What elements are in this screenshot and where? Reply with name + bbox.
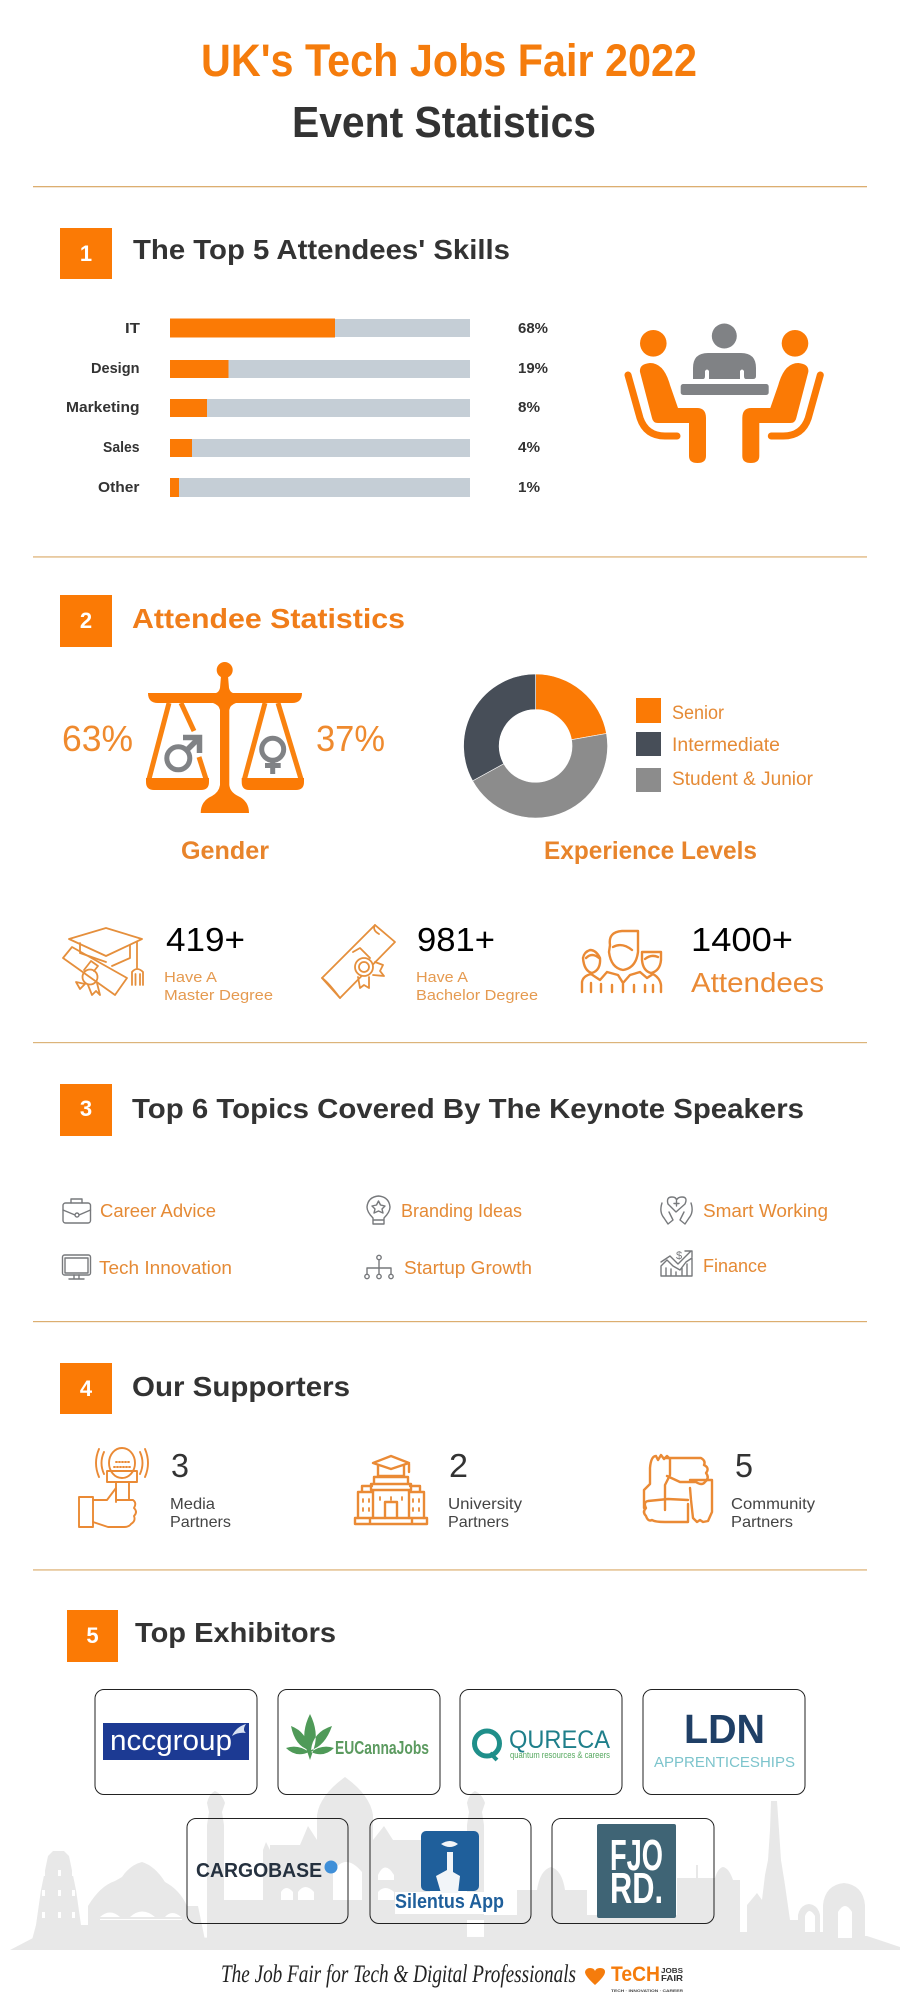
stat: media partners: 3 [171,1447,189,1484]
card: nccgroup: nccgroup [110,1725,232,1757]
stat: university partners: University [448,1496,522,1513]
topic: smart working: Smart Working [703,1201,828,1221]
topic: finance [661,1250,767,1276]
panel: keynote topics [60,1084,828,1279]
panel: top 5 skills [60,228,820,497]
stat: 1400+ attendees [691,921,824,998]
bar chart: skills: IT [125,320,140,337]
card: Fjord: RD. [610,1864,663,1913]
badge 1: 1 [80,241,92,266]
card: nccgroup [95,1690,257,1794]
card: Fjord: FJO [610,1831,663,1880]
bar chart: skills: 1% [518,479,540,496]
card: Silentus App: Silentus App [395,1891,504,1913]
topic: tech innovation: Tech Innovation [99,1258,232,1278]
label: gender: Gender [181,837,269,865]
badge 3: 3 [80,1096,92,1121]
card: QURECA: QURECA [509,1726,610,1754]
gender percentages: 37% [316,718,385,759]
card: Silentus App [370,1818,531,1924]
badge 2: 2 [80,608,92,633]
legend: experience levels: Student & Junior [672,769,814,790]
badge 1 [60,228,112,279]
stat: 981+ bachelors: 981+ [417,921,495,958]
panel: top exhibitors [67,1610,805,1924]
topic: smart working [661,1197,828,1224]
card: Cargobase: CARGOBASE [196,1860,322,1882]
logo: tech jobs fair: TeCH [611,1963,660,1986]
stat: 981+ bachelors: Bachelor Degree [416,987,538,1004]
icon: gender scale [146,662,304,813]
topic: branding ideas: Branding Ideas [401,1201,522,1221]
icon: attendees group [582,931,661,992]
stat: 419+ masters: Have A [164,969,217,986]
bar chart: skills: Sales [103,439,140,456]
badge 4: 4 [80,1376,93,1401]
stat: media partners [170,1447,231,1531]
badge 4 [60,1363,112,1414]
bar chart: skills: 68% [518,320,548,337]
topic: tech innovation [62,1255,232,1279]
stat: 419+ masters: 419+ [166,921,245,958]
badge 5: 5 [86,1623,99,1648]
card: Cargobase [187,1818,348,1924]
heading: top exhibitors: Top Exhibitors [135,1617,336,1648]
panel: supporters [60,1363,815,1531]
card: QURECA: quantum resources & careers [510,1750,610,1760]
legend: experience levels: Intermediate [672,735,780,756]
bar chart: skills: 4% [518,439,540,456]
logo: tech jobs fair [611,1963,683,1993]
icon: graduation cap [63,928,143,995]
bar chart: skills: 8% [518,399,540,416]
icon: joined hands [644,1455,712,1522]
bar chart: skills: Other [98,479,140,496]
stat: community partners: Partners [731,1514,793,1531]
bar chart: skills: Design [91,360,140,377]
topic: branding ideas [367,1196,522,1224]
stat: community partners: Community [731,1496,815,1513]
heading: keynote topics: Top 6 Topics Covered By The Keynote Speakers [132,1093,804,1124]
stat: 981+ bachelors: Have A [416,969,468,986]
title: UK's Tech Jobs Fair 2022 [201,35,697,86]
icon: heart [585,1968,605,1985]
topic: startup growth: Startup Growth [404,1258,532,1278]
bar chart: skills: Marketing [66,399,140,416]
card: LDN Apprenticeships: LDN [684,1706,765,1752]
stat: 1400+ attendees: Attendees [691,967,824,998]
badge 3 [60,1084,112,1136]
stat: 419+ masters: Master Degree [164,987,273,1004]
card: QURECA [460,1690,622,1794]
icon: microphone [79,1448,148,1527]
stat: media partners: Media [170,1496,215,1513]
heading: skills: The Top 5 Attendees' Skills [133,234,510,265]
topic: startup growth [365,1255,532,1279]
title: Event Statistics [292,98,596,147]
topic: career advice [63,1199,216,1223]
bar chart: skills: 19% [518,360,548,377]
stat: 981+ bachelors [416,921,538,1004]
topic: finance: Finance [703,1256,767,1276]
icon: diploma [322,925,395,998]
stat: 419+ masters [164,921,273,1004]
stat: media partners: Partners [170,1514,231,1531]
card: Fjord [552,1818,714,1924]
gender percentages: 63% [62,718,133,759]
footer: The Job Fair for Tech & Digital Professionals [221,1961,576,1988]
card: EUCannaJobs [278,1690,440,1794]
skyline background [10,1777,900,1950]
stat: university partners: 2 [449,1447,468,1484]
label: experience levels: Experience Levels [544,837,757,865]
topic: career advice: Career Advice [100,1201,216,1221]
heading: supporters: Our Supporters [132,1371,350,1402]
stat: university partners [448,1447,522,1531]
skyline cut-outs [42,1862,852,1938]
badge 5 [67,1610,118,1662]
stat: community partners: 5 [735,1447,753,1484]
card: LDN Apprenticeships: APPRENTICESHIPS [654,1754,795,1771]
logo: tech jobs fair: FAIR [661,1973,683,1983]
topic: finance: $ [676,1250,682,1262]
title [201,35,697,147]
bar chart: skills [66,318,548,497]
stat: 1400+ attendees: 1400+ [691,921,793,958]
heading: attendee statistics: Attendee Statistics [132,603,405,634]
legend: experience levels: Senior [672,703,725,724]
logo: tech jobs fair: TECH · INNOVATION · CAREER [611,1988,683,1993]
donut chart: experience levels [464,674,608,818]
logo: tech jobs fair: JOBS [661,1966,683,1975]
icon: university [355,1456,427,1524]
icon: meeting table [628,324,820,463]
stat: community partners [731,1447,815,1531]
panel: attendee statistics [60,595,824,1004]
badge 2 [60,595,112,647]
card: LDN Apprenticeships [643,1690,805,1794]
stat: university partners: Partners [448,1514,509,1531]
legend: experience levels [636,698,814,792]
card: EUCannaJobs: EUCannaJobs [335,1738,429,1758]
gender percentages [62,718,385,759]
